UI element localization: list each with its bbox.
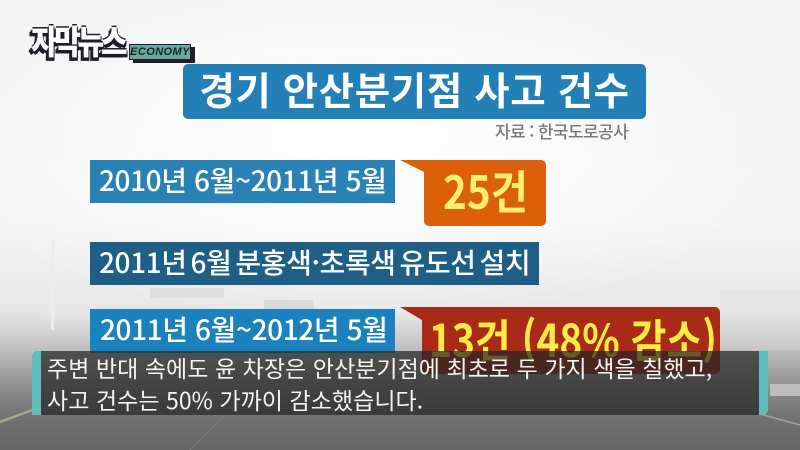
callout: 25건: 25건: [443, 158, 528, 223]
period bar 2010-2011: 2010년 6월~2011년 5월: [99, 160, 387, 200]
caption right accent: [759, 351, 768, 415]
source note: 자료 : 한국도로공사: [495, 118, 628, 143]
caption left accent: [32, 351, 41, 415]
logo wordmark: 자막뉴스: [31, 16, 124, 64]
title banner: 경기 안산분기점 사고 건수: [199, 61, 630, 117]
logo: 자막뉴스 ECONOMY: [28, 16, 195, 64]
caption text: 주변 반대 속에도 윤 차장은 안산분기점에 최초로 두 가지 색을 칠했고,: [47, 350, 712, 384]
installation bar: 2011년 6월 분홍색·초록색 유도선 설치: [99, 242, 530, 282]
period bar 2011-2012: 2011년 6월~2012년 5월: [100, 309, 388, 349]
caption dark panel: [41, 351, 759, 415]
caption text: 사고 건수는 50% 가까이 감소했습니다.: [47, 382, 423, 416]
caption text: [47, 350, 712, 416]
caption box: [32, 350, 768, 416]
callout: 25건: [400, 158, 546, 226]
logo ECONOMY tag: ECONOMY: [130, 46, 190, 58]
